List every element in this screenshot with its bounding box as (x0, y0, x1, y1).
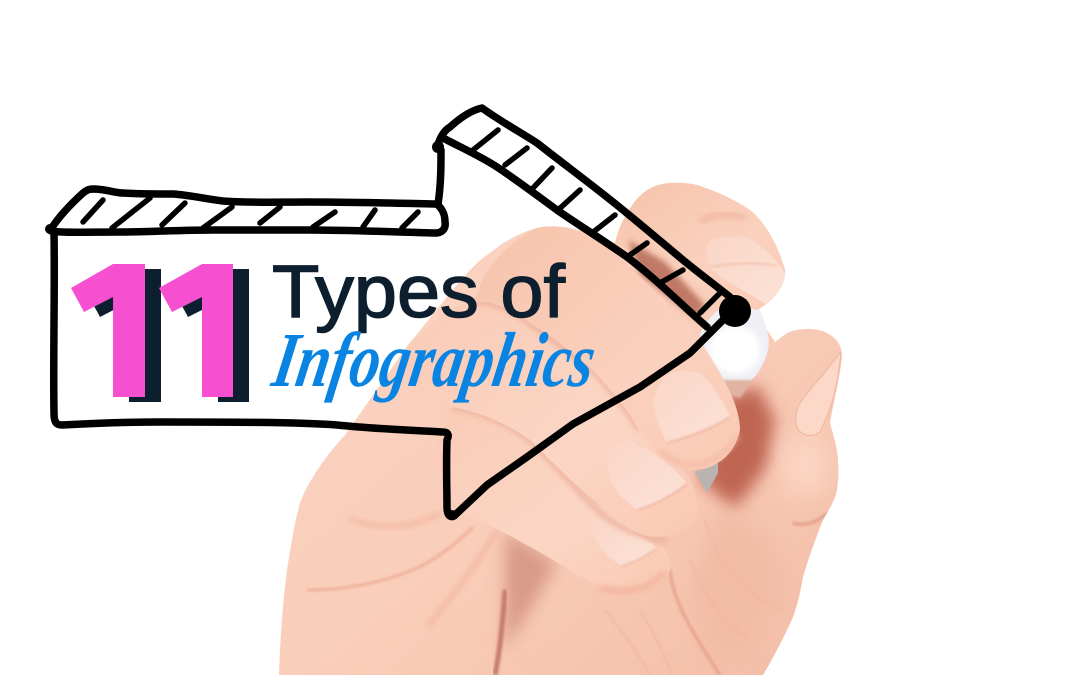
number face: 11 (71, 222, 267, 438)
arrow corner blobs (45, 141, 457, 520)
finger: top with nail (615, 183, 785, 318)
arrow outline (54, 232, 723, 517)
finger: fourth with nail (430, 407, 670, 592)
hand-drawn arrow (45, 108, 730, 520)
hand silhouette (279, 183, 842, 675)
crease under third finger (452, 407, 668, 540)
crease under second finger (475, 302, 640, 430)
number shadow: 11 (87, 227, 283, 443)
thumb nail (796, 352, 841, 435)
title line: Infographics: Infographics (266, 318, 602, 404)
number face (71, 264, 233, 397)
title line: Types of: Types of (272, 250, 565, 333)
photo: hand holding marker (279, 183, 842, 675)
marker tip (719, 295, 751, 327)
finger: third with nail (406, 301, 698, 537)
hand shading (307, 352, 841, 675)
marker body (695, 298, 769, 493)
finger: second with nail (475, 227, 740, 470)
number 11 (71, 264, 249, 402)
infographic canvas (45, 104, 842, 675)
number shadow (94, 269, 249, 402)
arrow hatching (83, 130, 720, 313)
arrow inner lines (51, 139, 707, 327)
arrow top band (51, 108, 730, 297)
